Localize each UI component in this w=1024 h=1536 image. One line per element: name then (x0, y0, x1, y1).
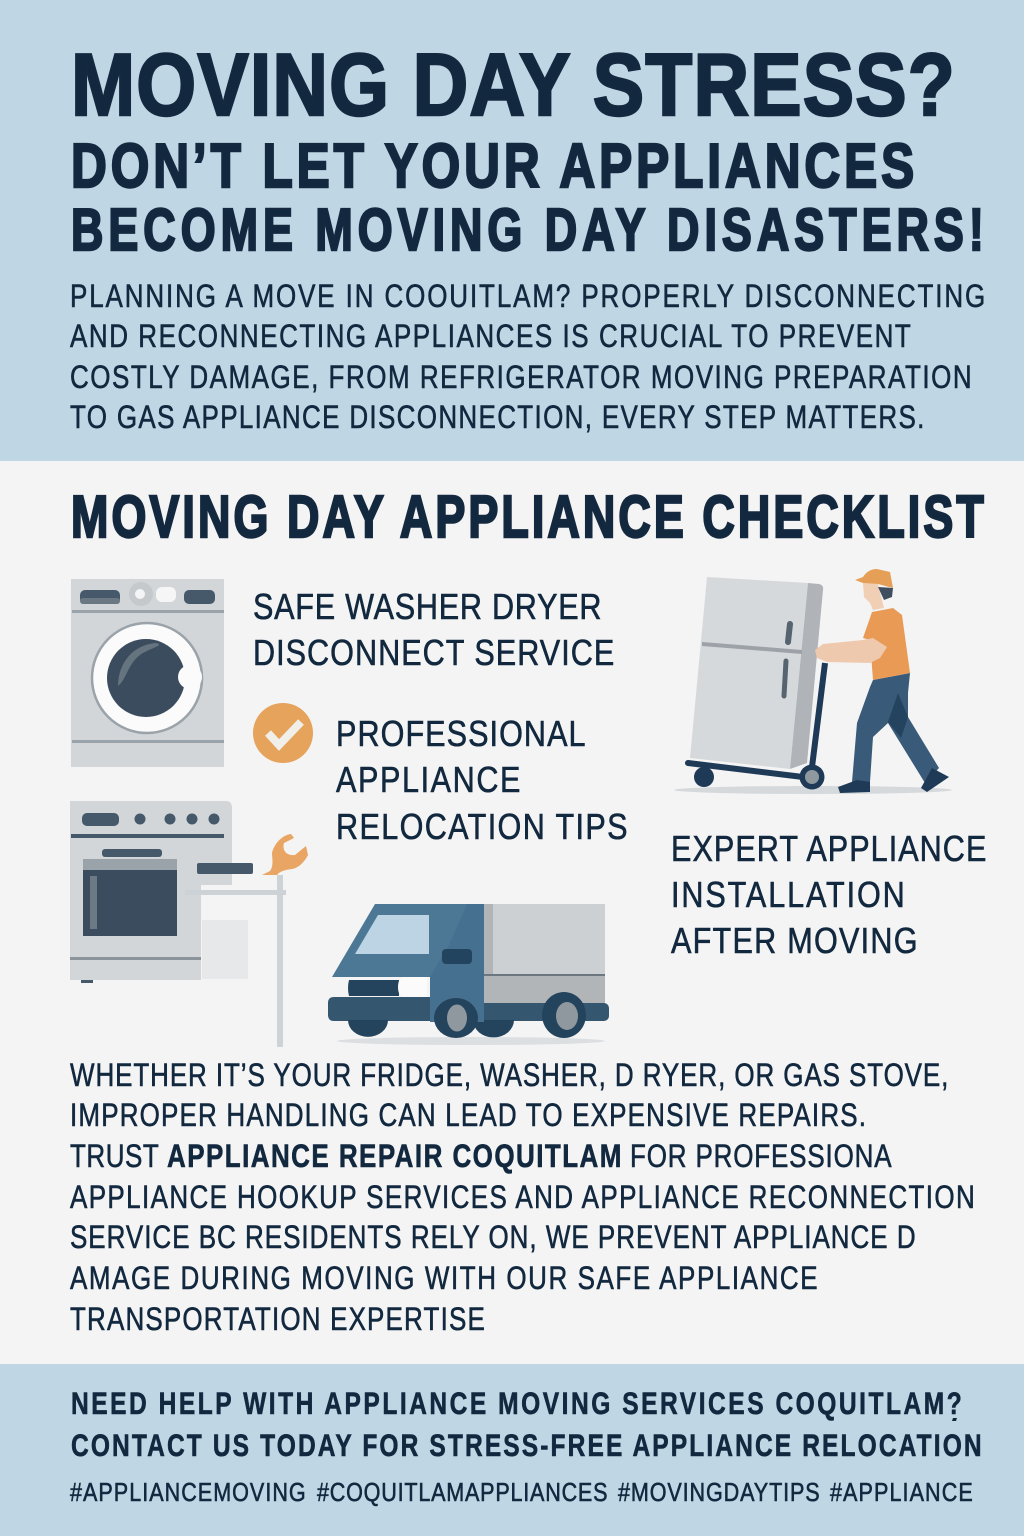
illustration: mover with refrigerator on hand truck (674, 569, 952, 794)
service label: installation: AFTER MOVING (671, 922, 918, 962)
service label: washer dryer: DISCONNECT SERVICE (253, 634, 614, 674)
hashtags: #MOVINGDAYTIPS (618, 1478, 820, 1508)
title: DON’T LET YOUR APPLIANCES (71, 131, 914, 200)
body paragraph: AMAGE DURING MOVING WITH OUR SAFE APPLIANCE (70, 1260, 818, 1297)
title: MOVING DAY STRESS? (71, 35, 955, 134)
service label: washer dryer: SAFE WASHER DRYER (253, 588, 601, 628)
call to action text (71, 1385, 982, 1463)
illustration: delivery truck (328, 904, 609, 1045)
call to action text: NEED HELP WITH APPLIANCE MOVING SERVICES COQUITLAM? (71, 1385, 962, 1421)
intro paragraph: PLANNING A MOVE IN COOUITLAM? PROPERLY DISCONNECTING (70, 278, 985, 315)
body paragraph: TRANSPORTATION EXPERTISE (70, 1301, 485, 1338)
icon: check mark (253, 703, 313, 763)
icon: stove with wrench (70, 801, 308, 1047)
panel: footer call to action (0, 1364, 1024, 1536)
service label: washer dryer (253, 588, 614, 674)
panel: header (0, 0, 1024, 461)
service label: installation: INSTALLATION (671, 876, 905, 916)
body paragraph: SERVICE BC RESIDENTS RELY ON, WE PREVENT APPLIANCE D (70, 1219, 916, 1256)
body paragraph: WHETHER IT’S YOUR FRIDGE, WASHER, D RYER, OR GAS STOVE, (70, 1057, 948, 1094)
title: BECOME MOVING DAY DISASTERS! (71, 198, 984, 264)
body paragraph: IMPROPER HANDLING CAN LEAD TO EXPENSIVE REPAIRS. (70, 1097, 866, 1134)
title (71, 35, 984, 264)
service label: installation: EXPERT APPLIANCE (671, 830, 986, 870)
icon: washing machine (71, 579, 224, 767)
intro paragraph: AND RECONNECTING APPLIANCES IS CRUCIAL TO PREVENT (70, 318, 911, 355)
service label: relocation tips: PROFESSIONAL (336, 715, 586, 755)
checklist heading: MOVING DAY APPLIANCE CHECKLIST (71, 485, 984, 551)
hashtags: #APPLIANCE (830, 1478, 973, 1508)
service label: relocation tips: APPLIANCE (336, 761, 520, 801)
intro paragraph: COSTLY DAMAGE, FROM REFRIGERATOR MOVING PREPARATION (70, 359, 972, 396)
service label: relocation tips: RELOCATION TIPS (336, 808, 628, 848)
service label: installation (671, 830, 986, 962)
hashtags: #APPLIANCEMOVING (70, 1478, 306, 1508)
body paragraph: FOR PROFESSIONA (630, 1138, 892, 1175)
intro paragraph: TO GAS APPLIANCE DISCONNECTION, EVERY STEP MATTERS. (70, 399, 924, 436)
body paragraph: TRUST (70, 1138, 159, 1175)
body paragraph: APPLIANCE REPAIR COQUITLAM (167, 1138, 621, 1175)
hashtags: #COQUITLAMAPPLIANCES (317, 1478, 607, 1508)
hashtags (70, 1478, 973, 1508)
body paragraph: APPLIANCE HOOKUP SERVICES AND APPLIANCE RECONNECTION (70, 1179, 975, 1216)
service label: relocation tips (336, 715, 628, 848)
body paragraph (70, 1057, 975, 1338)
call to action text: CONTACT US TODAY FOR STRESS-FREE APPLIANCE RELOCATION (71, 1427, 982, 1463)
intro paragraph (70, 278, 985, 436)
